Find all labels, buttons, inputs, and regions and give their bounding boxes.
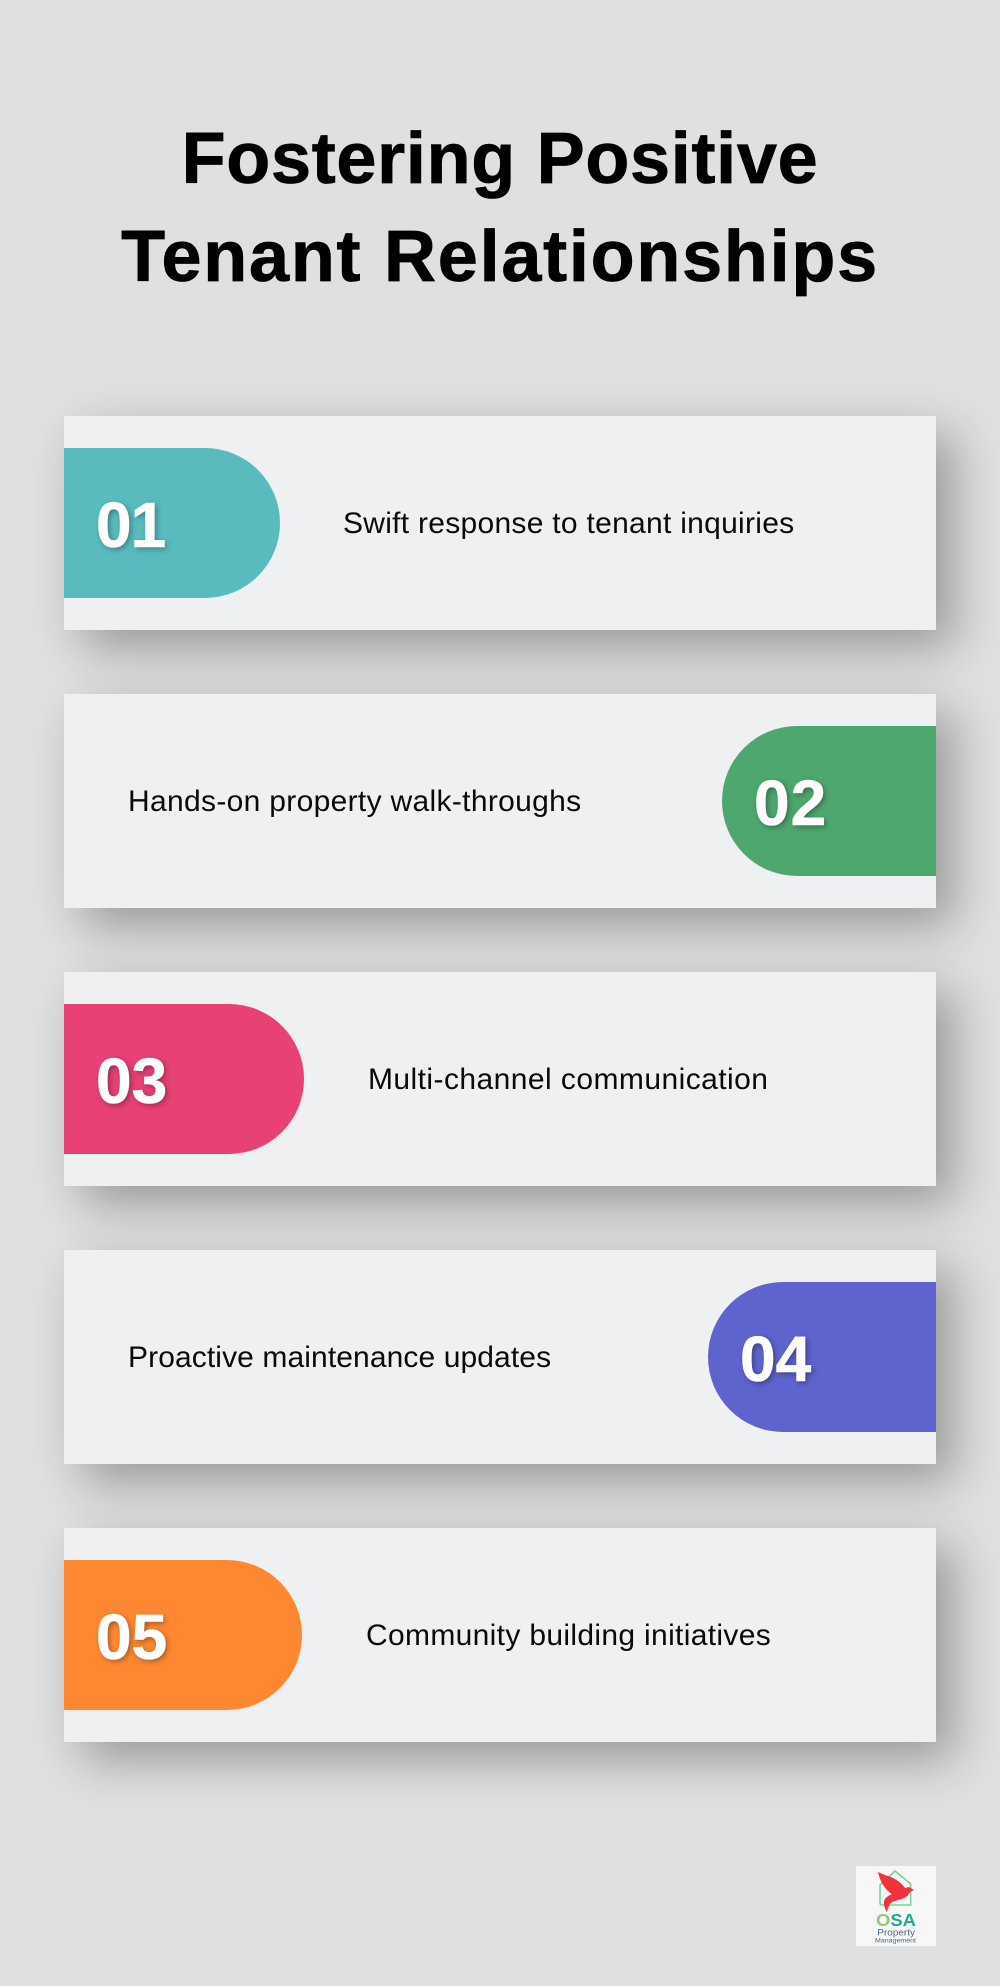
logo [856, 1866, 936, 1946]
pill: 03 [64, 1004, 304, 1154]
pill: 04 [708, 1282, 936, 1432]
title [121, 119, 879, 297]
pill: 05: 05 [96, 1601, 167, 1673]
panel: item 01 [64, 416, 936, 630]
panel: item 05 [64, 1528, 936, 1742]
pill: 01: 01 [96, 489, 165, 561]
icon: house outline [880, 1871, 911, 1905]
pill: 01 [64, 448, 280, 598]
pill: 05 [64, 1560, 302, 1710]
icon: red bird [878, 1872, 914, 1912]
text: item 01: Swift response to tenant inquiries [343, 506, 794, 540]
pill: 04: 04 [740, 1323, 811, 1395]
pill: 03: 03 [96, 1045, 167, 1117]
pill: 02 [722, 726, 936, 876]
logo text: Property [877, 1928, 915, 1939]
logo text: OSA [876, 1910, 916, 1930]
logo text [875, 1910, 916, 1945]
title: Tenant Relationships [121, 217, 879, 297]
text: item 03: Multi-channel communication [368, 1062, 768, 1096]
panel: item 03 [64, 972, 936, 1186]
title: Fostering Positive [182, 119, 818, 199]
text: item 02: Hands-on property walk-throughs [128, 784, 581, 818]
panel: item 04 [64, 1250, 936, 1464]
logo text: Management [875, 1938, 916, 1945]
text: item 05: Community building initiatives [366, 1618, 771, 1652]
text: item 04: Proactive maintenance updates [128, 1340, 551, 1374]
panel: item 02 [64, 694, 936, 908]
pill: 02: 02 [754, 767, 827, 839]
